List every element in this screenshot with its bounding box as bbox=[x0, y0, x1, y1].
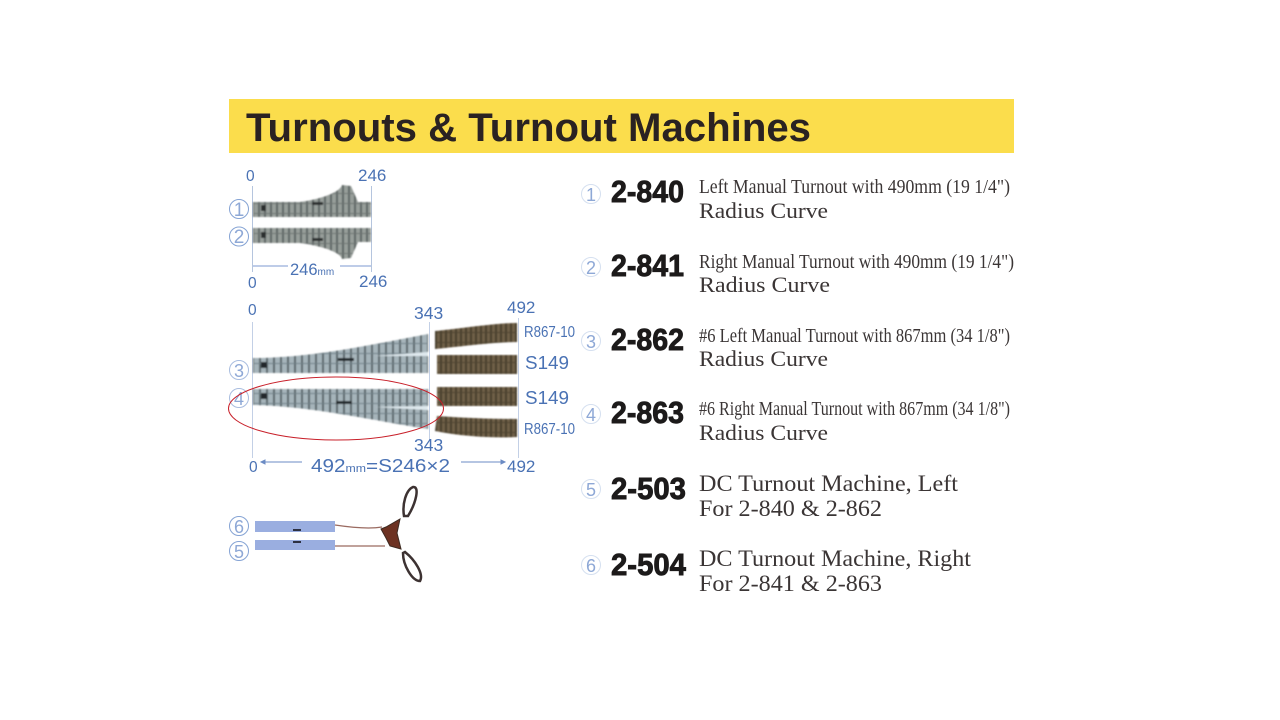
entry: 2-863: Radius Curve bbox=[699, 420, 828, 445]
icon: number 1 bbox=[230, 200, 248, 221]
icon: number 5 bbox=[230, 542, 248, 562]
diagram: short turnouts 1 and 2: 0 bbox=[246, 168, 255, 185]
labels: track codes: R867-10 bbox=[524, 421, 575, 438]
labels: track codes bbox=[524, 324, 575, 438]
entry: 2-863: #6 Right Manual Turnout with 867mm (34 1/8") bbox=[699, 398, 1010, 420]
dimension: 246mm: 246mm bbox=[290, 261, 334, 279]
entry: 2-840: Radius Curve bbox=[699, 198, 828, 223]
entry: 2-863: 4 bbox=[586, 405, 596, 425]
entry: 2-863 bbox=[582, 395, 1010, 445]
dimension: 492mm: 0 bbox=[249, 459, 258, 476]
diagram: short turnouts 1 and 2: 246 bbox=[358, 166, 386, 185]
icon: number 6 bbox=[230, 516, 248, 537]
dimension: 492mm bbox=[249, 455, 535, 476]
entry: 2-862: #6 Left Manual Turnout with 867mm (34 1/8") bbox=[699, 325, 1010, 347]
callout: red ellipse bbox=[228, 377, 444, 440]
wires and connector bbox=[335, 487, 421, 581]
diagram: short turnouts 1 and 2 bbox=[230, 166, 387, 292]
entry: 2-841 bbox=[582, 248, 1014, 297]
entry: 2-504: DC Turnout Machine, Right bbox=[699, 546, 972, 571]
icon: number 2 bbox=[230, 227, 248, 248]
entry: 2-862: 3 bbox=[586, 332, 596, 352]
diagram: short turnouts 1 and 2: 0 bbox=[248, 275, 257, 292]
track: S149 upper bbox=[437, 355, 517, 374]
entry: 2-503: DC Turnout Machine, Left bbox=[699, 471, 959, 496]
machine bar 6 bbox=[255, 521, 335, 532]
icon: number 6: 6 bbox=[234, 517, 244, 537]
entry: 2-503 bbox=[582, 471, 959, 521]
entry: 2-504: For 2-841 & 2-863 bbox=[699, 571, 882, 596]
machine bar 5 bbox=[255, 540, 335, 550]
track: S149 lower bbox=[437, 387, 517, 406]
diagram: short turnouts 1 and 2: 246 bbox=[359, 272, 387, 291]
entry: 2-841: Right Manual Turnout with 490mm (19 1/4") bbox=[699, 251, 1014, 273]
diagram: turnout machines bbox=[230, 487, 421, 581]
icon: number 5: 5 bbox=[234, 542, 244, 562]
diagram: long turnouts 3 and 4: 492 bbox=[507, 298, 535, 317]
diagram: long turnouts 3 and 4 bbox=[230, 298, 575, 476]
dimension: 492mm: 492 mm=S246×2 bbox=[311, 455, 450, 476]
diagram: long turnouts 3 and 4: 0 bbox=[248, 302, 257, 319]
entry: 2-503: 2-503 bbox=[611, 471, 686, 506]
icon: number 1: 1 bbox=[234, 200, 244, 221]
entry: 2-862 bbox=[582, 322, 1010, 371]
icon: number 4: 4 bbox=[234, 389, 244, 409]
track: curved R867-10 bottom bbox=[435, 416, 517, 437]
entry: 2-504: 6 bbox=[586, 556, 596, 576]
dimension: 246mm bbox=[253, 261, 371, 279]
entry: 2-841: Radius Curve bbox=[699, 272, 830, 297]
diagram: long turnouts 3 and 4: 343 bbox=[414, 303, 443, 323]
entry: 2-841: 2 bbox=[586, 258, 596, 278]
entry: 2-862: Radius Curve bbox=[699, 346, 828, 371]
entry: 2-840: 1 bbox=[586, 185, 596, 205]
track: turnout 4 bbox=[253, 389, 428, 429]
labels: track codes: S149 bbox=[525, 353, 569, 373]
icon: number 2: 2 bbox=[234, 227, 244, 248]
dimension: 492mm: 492 bbox=[507, 457, 535, 476]
icon: number 3 bbox=[230, 360, 248, 381]
icon: number 3: 3 bbox=[234, 361, 244, 381]
track: left turnout bbox=[253, 185, 371, 217]
labels: track codes: R867-10 bbox=[524, 324, 575, 341]
entry: 2-504: 2-504 bbox=[611, 547, 687, 582]
entry: 2-841: 2-841 bbox=[611, 248, 684, 283]
entry: 2-840: Left Manual Turnout with 490mm (19 1/4") bbox=[699, 176, 1010, 198]
labels: track codes: S149 bbox=[525, 388, 569, 408]
icon: number 4 bbox=[230, 388, 248, 409]
track: curved R867-10 top bbox=[435, 323, 517, 349]
entry: 2-503: For 2-840 & 2-862 bbox=[699, 496, 882, 521]
title: Turnouts & Turnout Machines bbox=[246, 106, 811, 150]
entry: 2-863: 2-863 bbox=[611, 395, 684, 430]
entry: 2-504 bbox=[582, 546, 972, 596]
entry: 2-862: 2-862 bbox=[611, 322, 684, 357]
track: turnout 3 bbox=[253, 334, 428, 373]
diagram: long turnouts 3 and 4: 343 bbox=[414, 435, 443, 455]
entry: 2-840: 2-840 bbox=[611, 174, 684, 209]
track: right turnout bbox=[253, 228, 371, 259]
entry: 2-503: 5 bbox=[586, 480, 596, 500]
entry: 2-840 bbox=[582, 174, 1010, 223]
list: product entries bbox=[582, 174, 1014, 596]
title band bbox=[229, 99, 1014, 153]
